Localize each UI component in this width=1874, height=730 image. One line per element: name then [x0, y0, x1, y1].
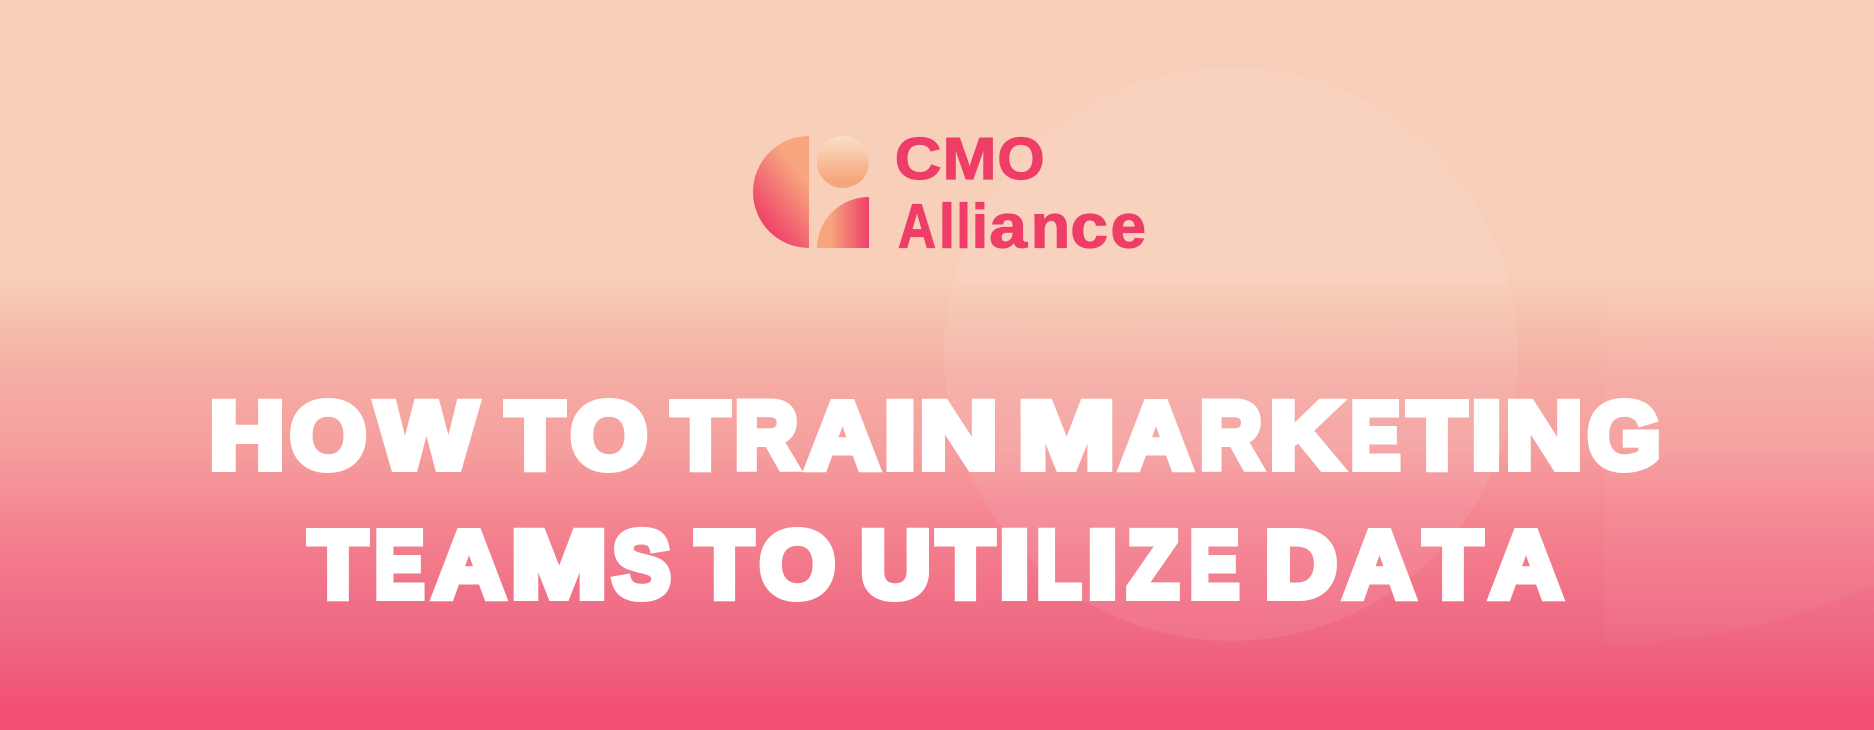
title line 1: T — [1408, 383, 1466, 489]
logo wordmark: e — [1110, 192, 1146, 262]
title line 2: O — [760, 512, 835, 618]
decorative background half circle — [1605, 0, 1874, 643]
logo wordmark: M — [942, 125, 997, 192]
title line 2: I — [1087, 512, 1118, 618]
title line 1: E — [1350, 383, 1400, 489]
title line 2: T — [309, 512, 367, 618]
title line 2: D — [1265, 512, 1337, 618]
logo wordmark: O — [997, 125, 1045, 192]
title line 2: Z — [1127, 512, 1179, 618]
title line 2: U — [860, 512, 931, 618]
title line 1: K — [1270, 383, 1341, 489]
title line 2: S — [612, 512, 670, 618]
logo wordmark: n — [1031, 192, 1070, 262]
title — [209, 383, 1661, 618]
logo wordmark: C — [895, 125, 942, 192]
title line 1: T — [672, 383, 729, 489]
logo wordmark: c — [1070, 192, 1108, 262]
title line 1: O — [290, 383, 366, 489]
title line 2: A — [1490, 512, 1562, 618]
title line 1: G — [1588, 383, 1661, 489]
title line 1: R — [735, 383, 798, 489]
logo wordmark — [895, 125, 1146, 262]
title line 2: A — [433, 512, 505, 618]
title line 1: N — [919, 383, 998, 489]
title line 2: T — [937, 512, 994, 618]
title line 1: M — [1018, 383, 1115, 489]
logo wordmark: l — [939, 192, 955, 262]
title line 1: I — [1471, 383, 1502, 489]
title line 2: E — [1190, 512, 1239, 618]
title line 2: M — [511, 512, 607, 618]
title line 2: L — [1036, 512, 1081, 618]
title line 1: I — [884, 383, 916, 489]
logo wordmark: a — [989, 192, 1028, 262]
decorative background circle — [944, 67, 1518, 641]
title line 2: I — [999, 512, 1030, 618]
logo wordmark: A — [898, 192, 936, 262]
title line 1: W — [377, 383, 477, 489]
title line 1: N — [1505, 383, 1583, 489]
title line 1: A — [1120, 383, 1192, 489]
logo wordmark: i — [972, 192, 988, 262]
title line 1: O — [571, 383, 647, 489]
title line 1: T — [506, 383, 564, 489]
title line 1: A — [806, 383, 879, 489]
title line 1: R — [1200, 383, 1262, 489]
logo: CMO Alliance — [753, 125, 1146, 262]
title line 2: T — [696, 512, 753, 618]
title line 2: E — [374, 512, 424, 618]
logo icon — [753, 136, 869, 248]
title line 2 — [309, 512, 1562, 618]
logo wordmark: l — [956, 192, 971, 262]
title line 2: T — [1424, 512, 1482, 618]
title line 1 — [209, 383, 1661, 489]
title line 2: A — [1344, 512, 1415, 618]
title line 1: H — [209, 383, 285, 489]
